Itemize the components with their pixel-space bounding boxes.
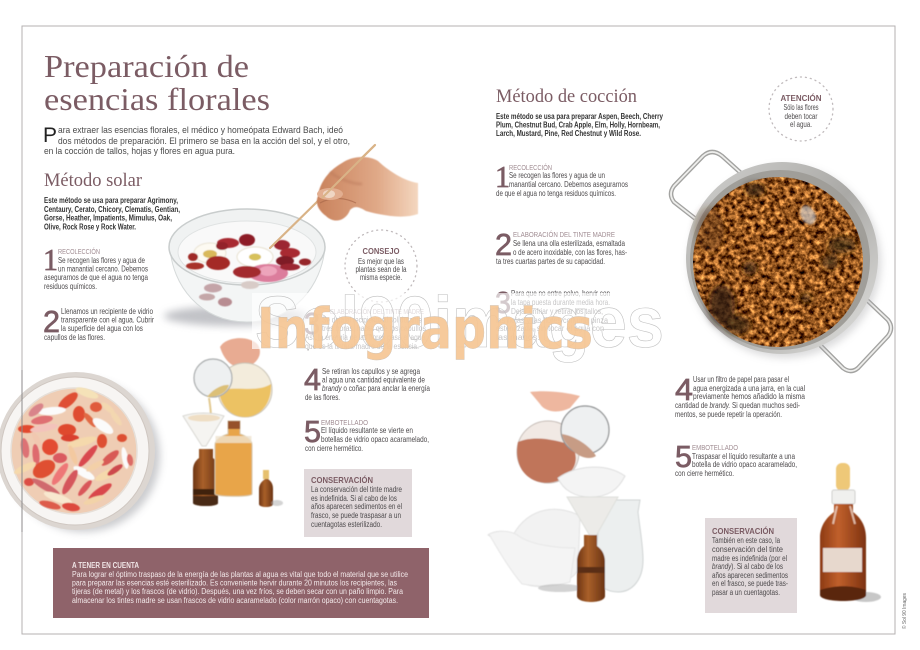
step 3 cocción: las manos. [496, 333, 540, 342]
step 1 solar: residuos químicos. [44, 282, 97, 291]
step 1 solar: un manantial cercano. Debemos [58, 264, 148, 274]
step 4 solar [304, 362, 430, 402]
step 1 cocción: de que el agua no tenga residuos químicos. [496, 189, 616, 198]
step 5 solar: EMBOTELLADO [321, 418, 368, 427]
step 5 cocción [675, 439, 797, 478]
panel: conservación solar: frasco, se puede traspasar a un [311, 511, 401, 520]
method cocción intro [496, 112, 663, 138]
method cocción intro: Larch, Mustard, Pine, Red Chestnut y Wild Rose. [496, 129, 641, 138]
intro text: dos métodos de preparación. El primero se basa en la acción del sol, y el otro, [58, 136, 350, 147]
intro text: en la cocción de tallos, hojas y flores en agua pura. [44, 146, 235, 157]
step 1 cocción [495, 159, 628, 198]
intro text: ara extraer las esencias florales, el médico y homeópata Edward Bach, ideó [58, 125, 343, 136]
method cocción intro: Plum, Chestnut Bud, Crab Apple, Elm, Holly, Hornbeam, [496, 120, 660, 130]
panel: conservación cocción: brandy). Si al cabo de los [712, 562, 783, 571]
step 4 cocción: Usar un filtro de papel para pasar el [693, 375, 789, 384]
step 3 solar [304, 306, 427, 351]
watermark fade panel [252, 293, 664, 349]
photo: pouring jars and bottles [183, 338, 283, 507]
step 2 cocción: ELABORACIÓN DEL TINTE MADRE [513, 230, 615, 239]
step 3 cocción: Para que no entre polvo, hervir con [511, 289, 610, 298]
callout: consejo: plantas sean de la [356, 265, 407, 274]
method solar intro [44, 196, 180, 232]
photo: dropper bottle [820, 463, 881, 602]
callout: consejo: CONSEJO [362, 246, 400, 256]
step 2 cocción: 2 [495, 227, 512, 262]
callout: atención: ATENCIÓN [780, 92, 822, 103]
step 4 cocción: agua energizada a una jarra, en la cual [693, 384, 805, 393]
step 1 cocción: manantial cercano. Debemos asegurarnos [509, 180, 628, 189]
step 2 solar: la superficie del agua con los [61, 324, 143, 333]
callout: consejo: misma especie. [360, 273, 402, 282]
photo: glass bowl with flowers [164, 209, 325, 326]
step 4 solar: 4 [304, 362, 321, 397]
heading: método solar: Método solar [44, 171, 142, 191]
photo: petri dish with petals [0, 370, 160, 532]
step 3 solar: tres horas, hasta que los capullos [322, 324, 426, 333]
panel: conservación solar: es indefinida. Si al cabo de los [311, 494, 397, 503]
step 1 solar: Se recogen las flores y agua de [58, 256, 145, 265]
panel: conservación solar: La conservación del tinte madre [311, 485, 402, 494]
watermark: Sol90images: Sol90images [255, 283, 664, 363]
step 5 cocción: 5 [675, 439, 692, 474]
step 1 solar: 1 [43, 242, 58, 277]
step 3 solar: Se deja el recipiente al sol durante [322, 316, 422, 324]
step 3 cocción: esterilizada, sin tocar el agua con [496, 324, 604, 333]
step 1 cocción: Se recogen las flores y agua de un [509, 171, 605, 180]
panel: conservación solar: años aparecen sedimentos en el [311, 502, 402, 511]
callout: consejo [345, 230, 417, 302]
callout: atención: Sólo las flores [784, 103, 818, 112]
panel: conservación cocción [705, 518, 797, 613]
step 2 solar: Llenamos un recipiente de vidrio [61, 307, 153, 316]
callout: atención: el agua. [790, 120, 812, 129]
step 2 cocción: Se llena una olla esterilizada, esmaltada [513, 239, 625, 248]
step 4 solar: al agua una cantidad equivalente de [322, 376, 425, 384]
panel: a tener en cuenta: almacenar los tintes madre se usan frascos de vidrio acaramelado (color marrón opaco) con cuentagotas. [72, 596, 398, 605]
step 4 solar: de las flores. [305, 393, 340, 402]
panel: conservación cocción: También en este caso, la [712, 536, 780, 545]
step 1 solar: RECOLECCIÓN [58, 247, 100, 256]
step 3 cocción [495, 285, 610, 342]
watermark: Infographics: Infographics [257, 297, 593, 362]
photo: filter funnel, jars and amber bottle [488, 391, 643, 602]
photo: steel pot with flowers [671, 152, 891, 371]
step 1 solar [43, 242, 148, 291]
step 2 solar: capullos de las flores. [44, 333, 105, 342]
panel: a tener en cuenta: para preparar las esencias esté esterilizado. Es conveniente hervir durante 20 minutos los recipientes, las [72, 579, 397, 588]
callout: consejo: Es mejor que las [358, 257, 404, 266]
step 2 cocción: ta tres cuartas partes de su capacidad. [496, 257, 605, 266]
panel: a tener en cuenta: Para lograr el óptimo traspaso de la energía de las plantas al agua es vital que todo el material que se utilice [72, 570, 408, 579]
panel: a tener en cuenta: A TENER EN CUENTA [72, 561, 139, 570]
panel: conservación cocción: conservación del tinte [712, 545, 783, 554]
callout: atención [769, 77, 833, 141]
step 4 cocción: previamente hemos añadido la misma [693, 392, 805, 401]
step 2 solar: 2 [43, 304, 60, 339]
title: Preparación de [44, 48, 249, 84]
step 4 cocción: 4 [675, 372, 693, 407]
title [44, 48, 270, 117]
panel: conservación solar [304, 469, 412, 537]
step 1 cocción: RECOLECCIÓN [509, 163, 552, 172]
panel: conservación solar: cuentagotas esterilizado. [311, 520, 382, 529]
step 5 cocción: Traspasar el líquido resultante a una [692, 452, 795, 461]
step 5 solar: El líquido resultante se vierte en [321, 426, 413, 435]
panel: conservación cocción: madre es indefinida (por el [712, 554, 787, 563]
panel: a tener en cuenta [53, 548, 429, 618]
step 5 cocción: EMBOTELLADO [692, 443, 738, 452]
step 5 cocción: con cierre hermético. [675, 469, 734, 478]
step 4 solar: Se retiran los capullos y se agrega [322, 367, 420, 376]
step 5 cocción: botella de vidrio opaco acaramelado, [692, 460, 797, 469]
step 5 solar: con cierre hermético. [305, 444, 363, 453]
intro text [43, 124, 350, 157]
panel: conservación solar: CONSERVACIÓN [311, 474, 373, 485]
method cocción intro: Este método se usa para preparar Aspen, Beech, Cherry [496, 112, 663, 121]
step 2 cocción: o de acero inoxidable, con las flores, has- [513, 248, 627, 257]
step 2 solar: transparente con el agua. Cubrir [61, 316, 154, 324]
panel: conservación cocción: en el frasco, se puede tras- [712, 579, 788, 588]
method solar intro: Centaury, Cerato, Chicory, Clematis, Gentian, [44, 205, 180, 214]
step 3 cocción: Dejar enfriar y retirar los tallos, [511, 307, 603, 316]
step 3 solar: 3 [304, 306, 320, 341]
step 4 cocción [675, 372, 805, 419]
step 2 solar [43, 304, 154, 342]
step 5 solar: 5 [304, 414, 321, 449]
panel: conservación cocción: CONSERVACIÓN [712, 525, 774, 536]
heading: método de cocción: Método de cocción [496, 87, 637, 107]
step 3 solar: Así, la energía de las flores pasa al agua, [305, 333, 427, 342]
callout: atención: deben tocar [784, 112, 818, 121]
step 3 cocción: 3 [495, 285, 511, 320]
method solar intro: Este método se usa para preparar Agrimony, [44, 196, 178, 205]
intro text: P [43, 124, 57, 147]
panel: conservación cocción: años aparecen sedimentos [712, 571, 788, 580]
method solar intro: Olive, Rock Rose y Rock Water. [44, 222, 136, 232]
step 2 cocción [495, 227, 627, 266]
step 3 cocción: la tapa puesta durante media hora. [511, 298, 610, 307]
photo: hand with stick [270, 145, 418, 248]
step 4 cocción: mentos, se puede repetir la operación. [675, 410, 782, 419]
panel: conservación cocción: pasar a un cuentagotas. [712, 588, 780, 597]
step 5 solar [304, 414, 429, 453]
step 4 cocción: cantidad de brandy. Si quedan muchos sedi- [675, 401, 800, 410]
step 1 solar: asegurarnos de que el agua no tenga [44, 273, 148, 282]
step 4 solar: brandy o coñac para anclar la energía [322, 384, 430, 393]
method solar intro: Gorse, Heather, Impatients, Mimulus, Oak, [44, 214, 172, 222]
title: esencias florales [44, 81, 270, 117]
step 1 cocción: 1 [495, 159, 510, 194]
step 3 solar: que es la tintura madre de la esencia. [305, 342, 419, 351]
step 3 cocción: las hojas y las flores con una pinza [496, 316, 608, 325]
image credit: © Sol 90 Images [901, 593, 908, 629]
panel: a tener en cuenta: tijeras (de metal) y los frascos (de vidrio). Después, una vez fríos, se deben secar con un paño limpio. Para [72, 587, 403, 596]
step 5 solar: botellas de vidrio opaco acaramelado, [321, 435, 429, 444]
step 3 solar: ELABORACIÓN DEL TINTE MADRE [330, 307, 424, 316]
